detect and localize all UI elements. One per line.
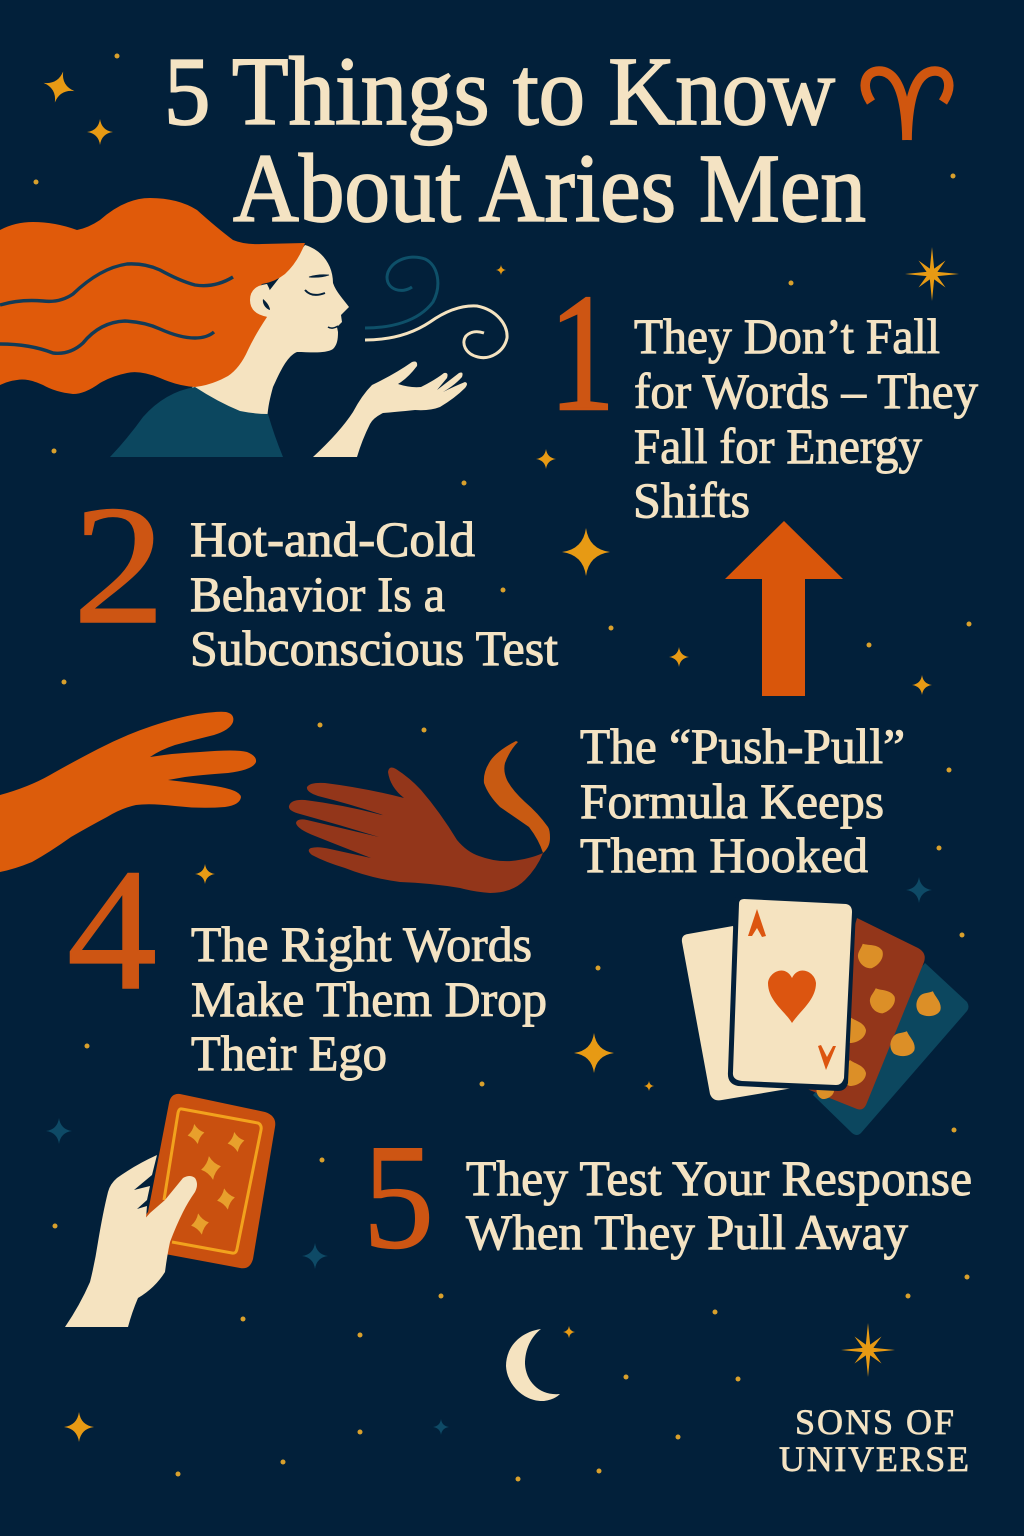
flame pips [816, 938, 947, 1099]
point 5 text: When They Pull Away [466, 1204, 908, 1260]
cream wind swirl [365, 306, 507, 358]
heart and ace marks [768, 971, 816, 1023]
number 4: 4 [67, 833, 157, 1026]
teal card [813, 963, 968, 1135]
hand [289, 768, 543, 893]
point 2 text [190, 511, 558, 676]
number 1: 1 [549, 260, 615, 446]
ear [250, 284, 272, 317]
illustration: fan of playing cards [682, 897, 968, 1135]
point 2 text: Subconscious Test [190, 620, 558, 676]
point 2 text: Behavior Is a [190, 566, 445, 622]
title: 5 Things to Know [164, 38, 835, 145]
teal wind swirl [365, 257, 438, 328]
illustration: woman with flowing hair blowing wind [0, 198, 507, 457]
hand [313, 362, 467, 457]
title: About Aries Men [233, 135, 866, 242]
title [164, 38, 866, 242]
point 1 text: Fall for Energy [634, 418, 922, 474]
brand footer: SONS OF [795, 1402, 954, 1442]
brand footer: UNIVERSE [779, 1439, 969, 1479]
point 3 text: Them Hooked [580, 827, 868, 883]
illustration: reaching orange arm [0, 712, 256, 872]
point 1 text: for Words – They [634, 363, 978, 419]
front card [728, 897, 856, 1091]
point 1 text [633, 308, 978, 528]
shirt [110, 387, 283, 457]
point 4 text: Make Them Drop [191, 971, 547, 1027]
starfield: teal sparkles [46, 877, 932, 1435]
point 4 text: Their Ego [191, 1025, 387, 1081]
point 3 text: Formula Keeps [580, 773, 884, 829]
number 5: 5 [363, 1114, 434, 1280]
number 2: 2 [73, 471, 165, 659]
illustration: dark hand with ribbon [289, 741, 550, 893]
eye and brow [309, 275, 329, 277]
point 5 text [466, 1150, 972, 1260]
point 1 text: They Don’t Fall [634, 308, 940, 364]
point 3 text [580, 718, 905, 883]
point 3 text: The “Push-Pull” [580, 718, 905, 774]
brand footer [779, 1402, 969, 1479]
icon: crescent moon [506, 1329, 560, 1401]
red card [807, 918, 925, 1110]
point 5 text: They Test Your Response [466, 1150, 972, 1206]
back cream card [682, 926, 793, 1100]
hair strands [0, 264, 233, 305]
point 2 text: Hot-and-Cold [190, 511, 475, 567]
face and neck [190, 245, 349, 420]
point 4 text: The Right Words [191, 916, 532, 972]
ribbon [484, 741, 550, 853]
point 4 text [191, 916, 547, 1081]
card diamonds [186, 1122, 246, 1236]
illustration: hand holding tarot card [65, 1094, 275, 1327]
arrow: up [725, 521, 843, 696]
icon: aries symbol [865, 71, 949, 140]
hand [65, 1155, 197, 1327]
hair [0, 198, 305, 394]
tarot card [133, 1094, 275, 1268]
point 1 text: Shifts [633, 472, 750, 528]
